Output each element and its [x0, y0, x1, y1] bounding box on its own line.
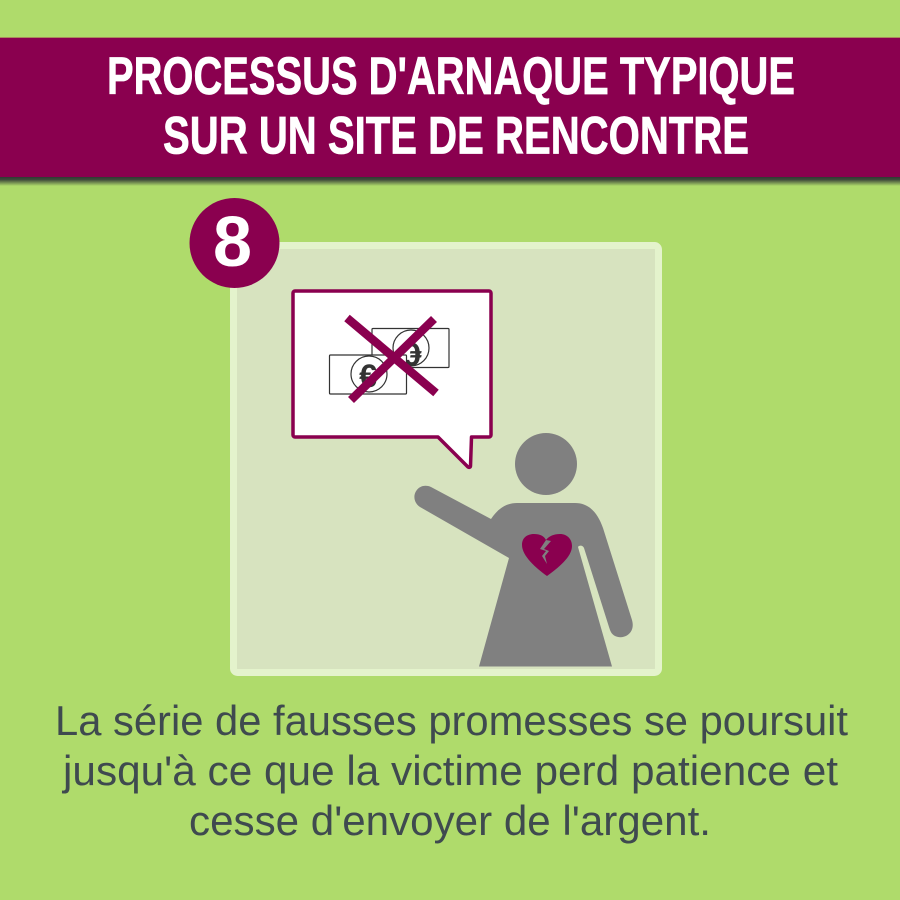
icon: cross-out	[347, 318, 436, 400]
icon: broken heart	[522, 534, 572, 576]
description text: La série de fausses promesses se poursuit	[55, 697, 848, 744]
speech bubble	[293, 291, 491, 467]
description text	[55, 697, 848, 844]
title	[107, 47, 795, 166]
description text: cesse d'envoyer de l'argent.	[189, 797, 711, 844]
panel: illustration frame	[234, 246, 658, 672]
step number badge: 8	[213, 203, 252, 282]
title banner	[0, 37, 900, 186]
step number badge	[190, 198, 280, 288]
icon: euro banknotes: €	[404, 336, 422, 372]
icon: euro banknotes: €	[359, 358, 377, 394]
icon: euro banknotes	[330, 328, 449, 394]
figure: woman with broken heart	[414, 433, 633, 666]
description text: jusqu'à ce que la victime perd patience et	[61, 747, 838, 794]
